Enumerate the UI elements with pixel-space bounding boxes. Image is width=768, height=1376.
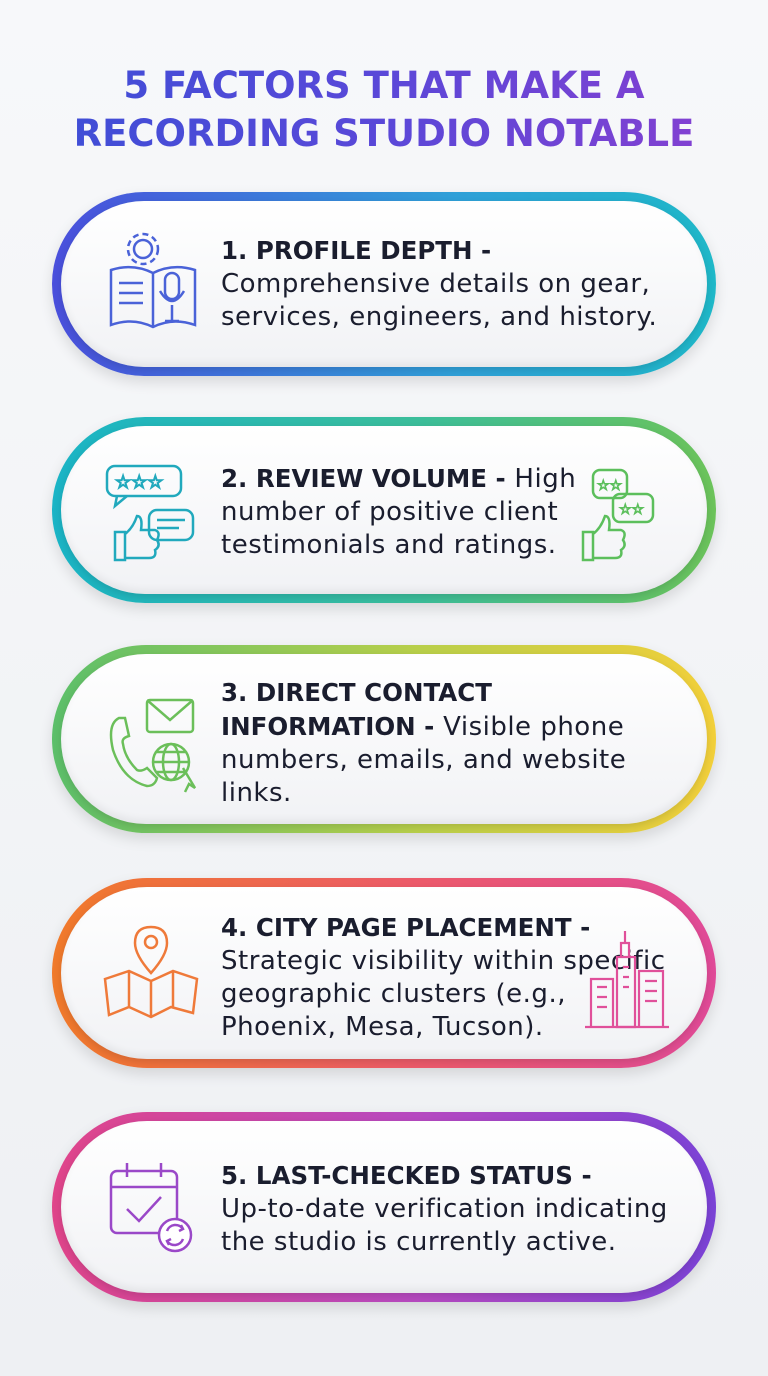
panel: city page placement (52, 878, 716, 1068)
title (0, 62, 768, 158)
text: profile depth: 1. PROFILE DEPTH - (221, 236, 491, 265)
title: 5 FACTORS THAT MAKE A (123, 64, 645, 107)
text: review volume: 2. REVIEW VOLUME - High (221, 464, 576, 494)
icon: rating bubbles right: ☆☆ (619, 502, 644, 518)
panel: last-checked status (52, 1112, 716, 1302)
icon: map with pin (104, 926, 198, 1018)
text: city page placement: geographic clusters (e.g., (221, 979, 566, 1009)
text: profile depth: Comprehensive details on gear, (221, 269, 650, 299)
icon: phone, envelope, globe (110, 698, 196, 792)
icon: rating bubbles left: ☆☆☆ (115, 472, 163, 493)
text: direct contact (221, 678, 626, 808)
icon: book with gear and microphone (110, 232, 196, 328)
title: RECORDING STUDIO NOTABLE (74, 112, 694, 155)
icon: calendar with check (110, 1163, 192, 1252)
text: review volume (221, 464, 576, 560)
text: last-checked status: the studio is currently active. (221, 1227, 617, 1257)
text: direct contact: numbers, emails, and website (221, 745, 626, 775)
icon: rating bubbles right: ☆☆ (597, 478, 622, 494)
text: last-checked status: Up-to-date verification indicating (221, 1194, 668, 1224)
text: direct contact: links. (221, 778, 292, 808)
text: city page placement: Phoenix, Mesa, Tucson). (221, 1012, 544, 1042)
panel: profile depth (52, 192, 716, 376)
text: profile depth: services, engineers, and history. (221, 302, 657, 332)
text: review volume: testimonials and ratings. (221, 530, 557, 560)
text: city page placement: 4. CITY PAGE PLACEMENT - (221, 913, 590, 942)
text: direct contact: INFORMATION - Visible phone (221, 712, 624, 742)
text: last-checked status (221, 1161, 668, 1257)
icon: rating bubbles right (582, 468, 654, 562)
text: review volume: number of positive client (221, 497, 558, 527)
icon: city skyline (585, 931, 669, 1028)
text: city page placement: Strategic visibility within specific (221, 946, 666, 976)
text: profile depth (221, 236, 657, 332)
panel: direct contact (52, 645, 716, 833)
text: city page placement (221, 913, 666, 1042)
icon: rating bubbles left (106, 464, 194, 562)
text: last-checked status: 5. LAST-CHECKED STATUS - (221, 1161, 592, 1190)
panel: review volume (52, 417, 716, 603)
text: direct contact: 3. DIRECT CONTACT (221, 678, 492, 707)
